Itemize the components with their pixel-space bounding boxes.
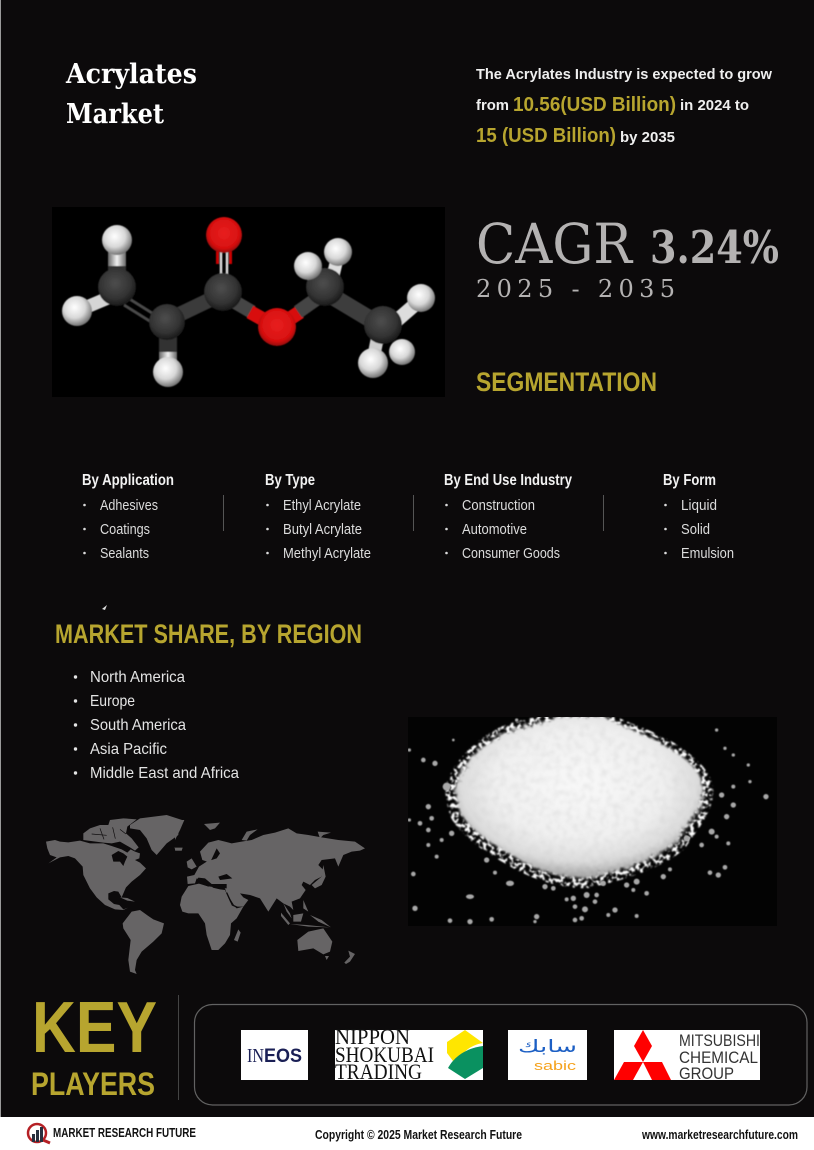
footer: MARKET RESEARCH FUTURE bbox=[53, 1126, 196, 1140]
title: Market bbox=[66, 99, 164, 130]
key players heading bbox=[31, 988, 157, 1102]
growth forecast text: The Acrylates Industry is expected to grow bbox=[476, 66, 772, 83]
segment column: By Application: Adhesives bbox=[100, 498, 158, 514]
logo: Mitsubishi Chemical Group: CHEMICAL bbox=[679, 1049, 758, 1067]
CAGR bbox=[476, 212, 779, 303]
Africa bbox=[180, 883, 243, 950]
logo: Nippon Shokubai Trading: SHOKUBAI bbox=[335, 1042, 434, 1067]
segment column: By End Use Industry bbox=[444, 472, 572, 562]
segment column: By Form: Solid bbox=[681, 522, 710, 538]
segment column: By End Use Industry: Automotive bbox=[462, 522, 527, 538]
segment column: By Type: Ethyl Acrylate bbox=[283, 498, 361, 514]
segment column: By Application: Sealants bbox=[100, 546, 149, 562]
segmentation heading: SEGMENTATION bbox=[476, 367, 657, 397]
Greenland bbox=[130, 815, 184, 855]
key players heading: KEY bbox=[32, 988, 157, 1068]
segment column: By Form: By Form bbox=[663, 472, 716, 489]
segment column: By End Use Industry: Consumer Goods bbox=[462, 546, 560, 562]
region list bbox=[74, 669, 239, 782]
North America bbox=[46, 840, 146, 910]
logo: INEOS bbox=[241, 1030, 308, 1080]
region list: North America bbox=[90, 669, 185, 686]
title bbox=[65, 59, 197, 130]
logo: SABIC bbox=[508, 1030, 587, 1080]
Eurasia bbox=[187, 828, 365, 912]
segment column: By End Use Industry: By End Use Industry bbox=[444, 472, 572, 489]
Arctic islands bbox=[83, 818, 139, 851]
segment column: By Form: Emulsion bbox=[681, 546, 734, 562]
footer: Copyright © 2025 Market Research Future bbox=[315, 1128, 522, 1142]
Eurasia, Africa and Oceania bbox=[175, 820, 365, 964]
segment column: By Type bbox=[265, 472, 371, 562]
region list: South America bbox=[90, 717, 186, 734]
segment column: By End Use Industry: Construction bbox=[462, 498, 535, 514]
world map bbox=[46, 815, 365, 974]
Americas and Greenland bbox=[46, 815, 184, 974]
title: Acrylates bbox=[65, 59, 197, 90]
logo: INEOS: IN bbox=[247, 1045, 264, 1067]
segment column: By Application: By Application bbox=[82, 472, 174, 489]
CAGR: 2025 - 2035 bbox=[476, 275, 675, 303]
growth forecast text: 10.56(USD Billion) bbox=[513, 94, 676, 116]
powder image bbox=[408, 712, 777, 926]
market share heading: MARKET SHARE, BY REGION bbox=[55, 619, 362, 649]
molecule image bbox=[52, 207, 445, 397]
logo: Mitsubishi Chemical Group bbox=[614, 1030, 760, 1083]
segment column: By Application bbox=[82, 472, 174, 562]
growth forecast text: 15 (USD Billion) bbox=[476, 125, 616, 147]
logo: Mitsubishi Chemical Group: MITSUBISHI bbox=[679, 1032, 760, 1050]
Australia bbox=[297, 928, 332, 954]
logo: SABIC: سابك bbox=[518, 1037, 577, 1057]
region list: Europe bbox=[90, 693, 135, 710]
key players heading: PLAYERS bbox=[31, 1066, 155, 1102]
growth forecast text: from bbox=[476, 97, 509, 114]
logo: Nippon Shokubai Trading bbox=[335, 1024, 483, 1084]
segment column: By Form bbox=[663, 472, 734, 562]
segment column: By Type: By Type bbox=[265, 472, 315, 489]
South America bbox=[123, 910, 164, 974]
logo: Nippon Shokubai Trading: TRADING bbox=[335, 1059, 422, 1084]
logo: Mitsubishi Chemical Group: GROUP bbox=[679, 1065, 734, 1083]
growth forecast text bbox=[476, 66, 772, 147]
region list: Asia Pacific bbox=[90, 741, 167, 758]
segment column: By Type: Methyl Acrylate bbox=[283, 546, 371, 562]
logo: SABIC: sabic bbox=[534, 1058, 577, 1073]
segment column: By Type: Butyl Acrylate bbox=[283, 522, 362, 538]
region list: Middle East and Africa bbox=[90, 765, 239, 782]
key players panel bbox=[194, 1004, 807, 1105]
growth forecast text: in 2024 to bbox=[680, 97, 749, 114]
footer bbox=[0, 1117, 814, 1150]
segment column: By Form: Liquid bbox=[681, 498, 717, 514]
CAGR: CAGR bbox=[476, 212, 633, 276]
growth forecast text: by 2035 bbox=[620, 129, 675, 146]
logo: Nippon Shokubai Trading: NIPPON bbox=[335, 1024, 410, 1049]
segment column: By Application: Coatings bbox=[100, 522, 150, 538]
logo: INEOS: EOS bbox=[264, 1046, 302, 1067]
CAGR: 3.24% bbox=[650, 221, 779, 274]
footer logo bbox=[28, 1124, 50, 1143]
